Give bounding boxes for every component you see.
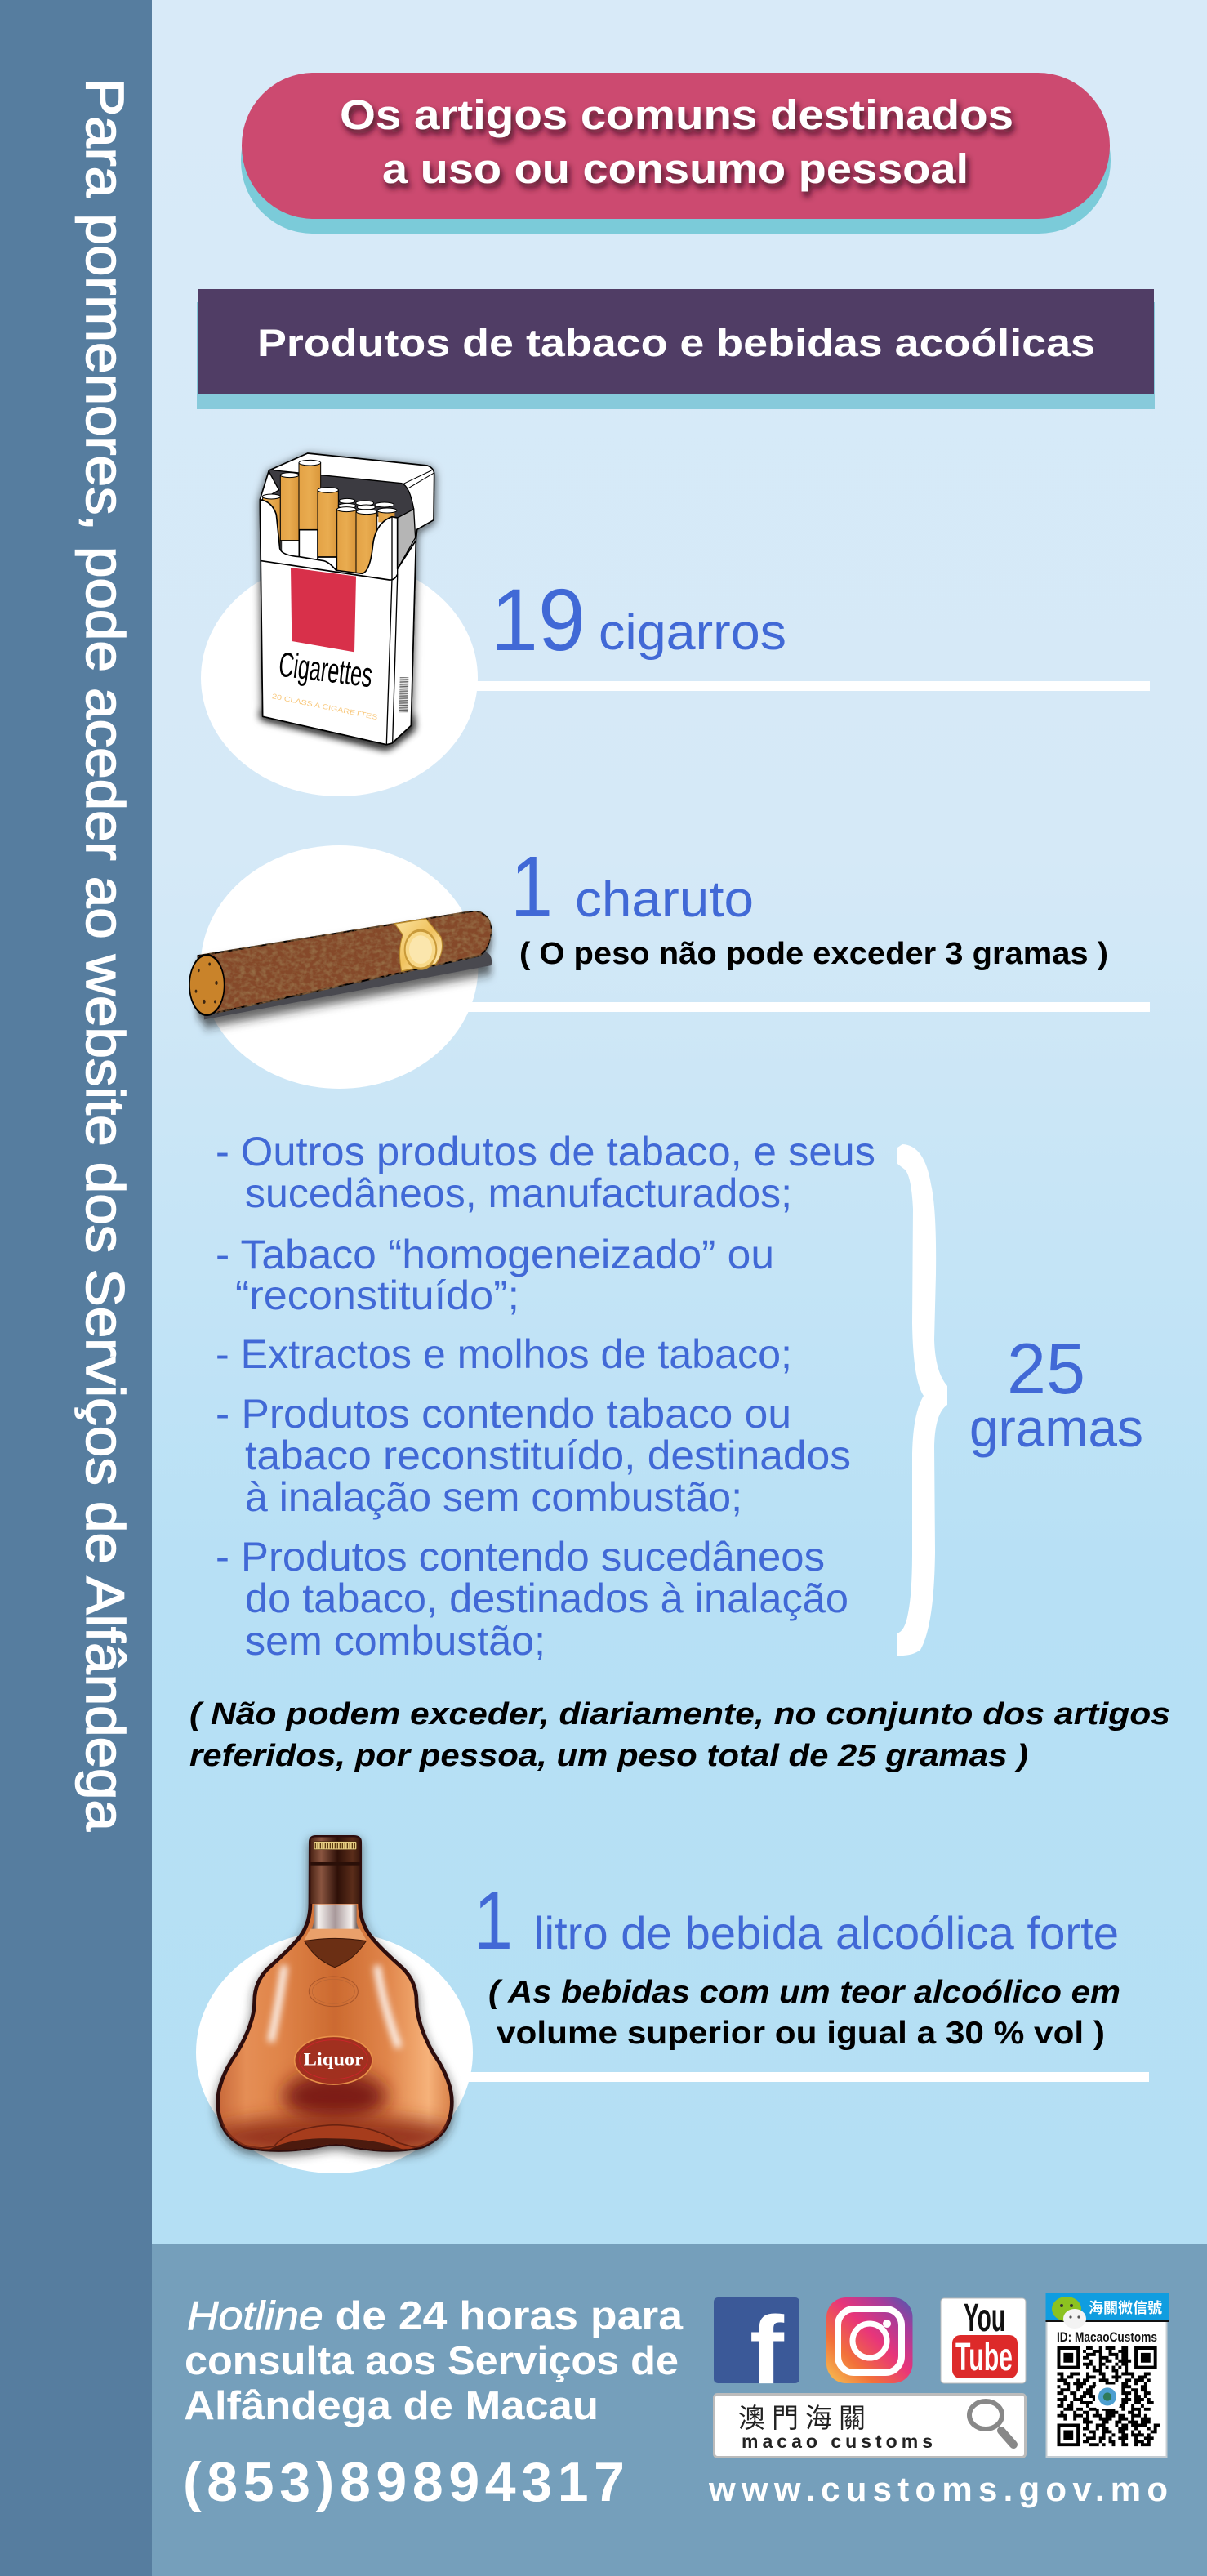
icon: liquor bottle [207, 1837, 463, 2158]
section heading bar: Produtos de tabaco e bebidas acoólicas [257, 321, 1095, 364]
note: daily limit: referidos, por pessoa, um peso total de 25 gramas ) [189, 1739, 1028, 1773]
tobacco products list: sucedâneos, manufacturados; [245, 1170, 792, 1216]
phone number: (853)89894317 [183, 2451, 625, 2513]
white circle: liquor [196, 1932, 473, 2173]
icon: wechat bubbles [1052, 2297, 1086, 2329]
hotline text: consulta aos Serviços de [185, 2339, 679, 2383]
tobacco products list: à inalação sem combustão; [245, 1474, 742, 1520]
hotline text: Hotline de 24 horas para [187, 2294, 684, 2338]
text: 19 cigarros [491, 570, 786, 669]
tobacco products list: - Extractos e molhos de tabaco; [216, 1331, 792, 1377]
icon: youtube: You [964, 2297, 1005, 2340]
title text: a uso ou consumo pessoal [382, 145, 969, 192]
note: alcohol content: ( As bebidas com um teor alcoólico em [488, 1975, 1120, 2010]
sidebar vertical text: Para pormenores, pode aceder ao website dos Serviços de Alfândega [75, 78, 136, 1831]
brace [897, 1144, 947, 1656]
QR code [1057, 2346, 1160, 2446]
text: 19 cigarros: 19 [491, 570, 586, 669]
title text: Os artigos comuns destinados [340, 91, 1013, 138]
left sidebar [0, 0, 152, 2576]
text: 1 litro: 1 [474, 1875, 513, 1967]
tobacco products list: - Tabaco “homogeneizado” ou [216, 1232, 774, 1277]
text: 25 gramas [969, 1328, 1143, 1458]
icon: cigarette pack: 20 CLASS A CIGARETTES [271, 692, 379, 721]
search box [714, 2395, 1026, 2457]
divider lines [457, 681, 1150, 2082]
search box: macao customs [742, 2431, 933, 2452]
icon: facebook: f [750, 2297, 785, 2404]
hotline text [184, 2294, 684, 2428]
tobacco products list: “reconstituído”; [235, 1272, 519, 1318]
section heading bar [197, 289, 1155, 409]
search box: 澳門海關 [738, 2403, 866, 2433]
wechat QR card: ID: MacaoCustoms [1057, 2329, 1157, 2345]
tobacco products list: sem combustão; [245, 1618, 546, 1664]
pack label text: Cigarettes [277, 645, 375, 695]
note: alcohol content [488, 1975, 1120, 2051]
tobacco products list [216, 1129, 875, 1664]
tobacco products list: - Outros produtos de tabaco, e seus [216, 1129, 875, 1174]
title text [340, 91, 1013, 192]
icon: youtube: Tube [955, 2336, 1013, 2379]
icon: instagram [826, 2297, 913, 2383]
footer panel [152, 2244, 1207, 2576]
text: 1 charuto: charuto [575, 871, 754, 928]
wechat QR card [1045, 2293, 1169, 2457]
white circle: cigarettes [201, 559, 478, 796]
icon: magnifier [969, 2401, 1013, 2445]
text: 1 litro: litro de bebida alcoólica forte [534, 1907, 1119, 1959]
note: alcohol content: volume superior ou igual a 30 % vol ) [497, 2016, 1105, 2051]
icon: cigarette pack [259, 453, 434, 750]
text: 25 gramas: gramas [969, 1397, 1143, 1458]
note: daily limit [189, 1697, 1170, 1773]
text: 25 gramas: 25 [1007, 1328, 1085, 1409]
note: daily limit: ( Não podem exceder, diariamente, no conjunto dos artigos [189, 1697, 1170, 1731]
hotline text: Alfândega de Macau [184, 2384, 599, 2428]
wechat QR card: 海關微信號 [1089, 2300, 1162, 2316]
white circle: cigar [201, 845, 479, 1089]
icon: facebook [714, 2297, 799, 2404]
icon: youtube [941, 2297, 1026, 2383]
text: 1 litro [474, 1875, 1120, 2051]
title pill [241, 73, 1111, 234]
tobacco products list: tabaco reconstituído, destinados [245, 1433, 851, 1478]
bottle label text: Liquor [304, 2049, 363, 2070]
tobacco products list: - Produtos contendo tabaco ou [216, 1391, 791, 1437]
website address: www.customs.gov.mo [708, 2470, 1168, 2508]
text: 1 charuto [510, 839, 1108, 971]
note: cigar weight: ( O peso não pode exceder 3 gramas ) [519, 937, 1108, 971]
icon: cigar [189, 911, 492, 1019]
tobacco products list: do tabaco, destinados à inalação [245, 1575, 848, 1621]
text: 1 charuto: 1 [510, 839, 553, 935]
tobacco products list: - Produtos contendo sucedâneos [216, 1534, 825, 1580]
text: 19 cigarros: cigarros [599, 604, 786, 661]
